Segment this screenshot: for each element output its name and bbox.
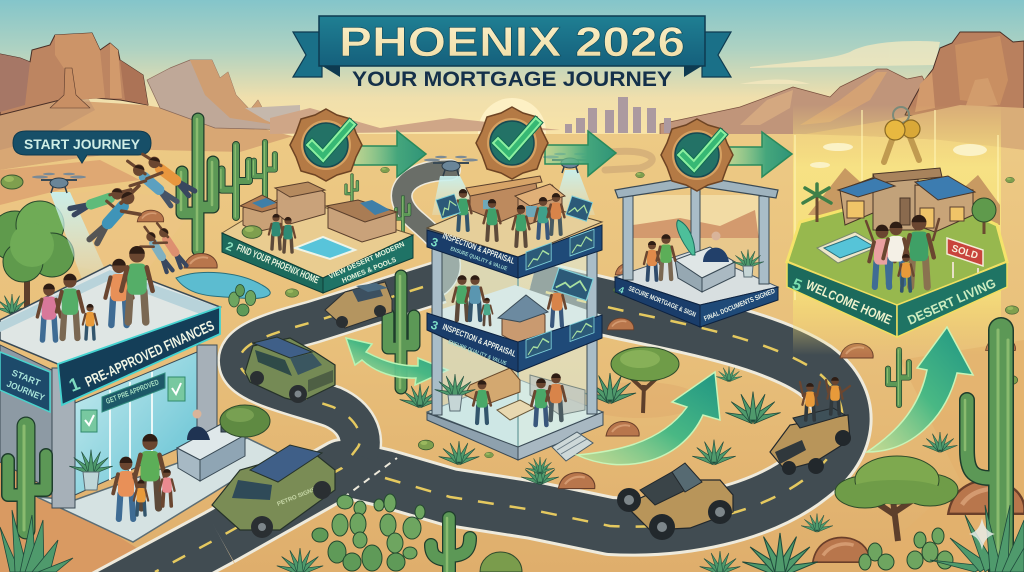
panel 3: inspection and appraisal tower: INSPECTION & APPRAISAL (441, 230, 516, 266)
drones (424, 156, 478, 176)
band (787, 262, 897, 337)
agave bottom left (0, 510, 73, 572)
clients seated (644, 241, 660, 280)
left slopes (0, 100, 300, 170)
corner pillars (52, 368, 75, 508)
panel 2: find your phoenix home: 2 (224, 239, 236, 254)
get pre approved sign (102, 373, 165, 412)
clouds (740, 41, 940, 84)
suv: upper green (245, 337, 335, 403)
badge check two (476, 107, 548, 179)
callout: start journey (13, 131, 151, 163)
left band (222, 233, 323, 293)
upper band (427, 230, 518, 278)
roof deck (0, 265, 220, 365)
start journey sign (0, 352, 50, 412)
panel 3: inspection and appraisal tower (424, 153, 603, 461)
panel 1: pre-approved finances building: GET PRE APPROVED (104, 377, 160, 406)
ground floor furniture (465, 368, 520, 405)
panel 1: pre-approved finances building: JOURNEY (5, 379, 46, 403)
drone beams (432, 176, 480, 215)
pale second mesa (147, 60, 298, 130)
prickly pear cluster right (859, 528, 953, 570)
sign band (58, 307, 220, 405)
panel 2: find your phoenix home: HOMES & POOLS (341, 257, 398, 285)
sold sign (953, 262, 978, 278)
glass checks (81, 377, 185, 432)
pale centre ridge (270, 108, 560, 134)
panel 4: secure mortgage and sign: FINAL DOCUMENTS SIGNED (703, 288, 776, 323)
panel 2: find your phoenix home: VIEW DESERT MODERN (328, 241, 406, 281)
title banner: PHOENIX 2026 (339, 18, 685, 65)
left tree (0, 201, 74, 315)
mid saguaro beside road (388, 276, 414, 388)
middle floor house and people (502, 305, 545, 345)
arrow: badge one to two (354, 131, 426, 177)
small tree by tower (611, 347, 679, 413)
panel 1: pre-approved finances building: START (10, 368, 42, 388)
family walking (113, 457, 139, 519)
advisor (712, 232, 720, 240)
potted plant (68, 450, 114, 475)
shrub beside building (220, 405, 270, 437)
background cacti and scrub (1, 142, 1024, 572)
plant (731, 250, 765, 268)
panel 4: secure mortgage and sign (615, 176, 778, 327)
window scene (633, 195, 759, 280)
arrow: badge two to three (545, 131, 616, 176)
mountains (808, 168, 1000, 225)
glow column (793, 105, 1001, 355)
jeep: road front (617, 463, 733, 540)
desert ground (0, 134, 1024, 572)
panel 5: welcome home: DESERT LIVING (905, 275, 998, 328)
glass walls (432, 248, 518, 447)
arrow: curved growth arrow center (577, 372, 720, 465)
panel: oasis pond (176, 254, 270, 316)
panel 4: secure mortgage and sign: 4 (617, 284, 625, 296)
band (615, 277, 700, 327)
right ridge (660, 69, 940, 135)
panel 3: inspection and appraisal tower: INSPECTION & APPRAISAL (441, 322, 518, 359)
top floor house (470, 178, 540, 222)
arrow: badge three to home (727, 132, 792, 177)
panel 3: inspection and appraisal tower: ENSURE QUALITY & VALUE (447, 339, 508, 367)
couple (269, 214, 283, 249)
lower band (427, 313, 518, 372)
phoenix skyline (565, 97, 671, 133)
shrub bottom (480, 552, 522, 572)
panel 4: secure mortgage and sign: SECURE MORTGAGE & SIGN (627, 285, 697, 319)
drone over start (32, 173, 112, 285)
agave bottom right (930, 505, 1024, 572)
sky background (0, 0, 1024, 140)
big right saguaro (965, 330, 1008, 571)
badge check one (290, 109, 362, 181)
title banner (293, 16, 731, 77)
icon: golden keys (884, 107, 920, 162)
reception desk (177, 423, 245, 460)
family on roof (37, 283, 61, 340)
right band (323, 235, 413, 293)
distant mountains (0, 32, 1024, 170)
bottom-left saguaro (8, 426, 46, 530)
left wing wall (0, 345, 52, 490)
bottom centre saguaro (431, 518, 470, 571)
icon: sparkle watermark (969, 518, 995, 550)
pool (817, 232, 880, 263)
stairs (552, 432, 593, 461)
desk (675, 247, 735, 278)
panel 5: welcome home: SOLD (950, 243, 979, 262)
right tree (982, 215, 986, 234)
house (840, 178, 880, 225)
jeep: couple waving (770, 377, 851, 475)
clouds (810, 143, 987, 168)
floor (615, 250, 778, 305)
family (869, 225, 895, 287)
pillars (623, 196, 633, 280)
centre saguaro (181, 119, 213, 250)
panel 3: inspection and appraisal tower: ENSURE QUALITY & VALUE (449, 246, 508, 272)
panel 1: pre-approved finances building (0, 246, 278, 542)
pillars (432, 247, 442, 415)
panel 1: pre-approved finances building: 1 (66, 373, 83, 396)
panel 3: inspection and appraisal tower: 3 (429, 318, 440, 333)
suv: lower green with solar roof (212, 445, 335, 538)
lawn (787, 208, 1007, 307)
sidewalk (37, 438, 278, 542)
panel 5: welcome home: 5 (790, 276, 804, 295)
far winding roads (402, 151, 652, 285)
arrow: curved growth arrow right (867, 327, 973, 452)
big acacia tree (835, 456, 958, 541)
pool (295, 237, 355, 259)
floor two deck (430, 285, 602, 345)
road network (92, 282, 843, 572)
callout: start journey: START JOURNEY (24, 137, 140, 152)
flying family figures (70, 153, 201, 274)
left mesa (0, 33, 148, 115)
roof frame (615, 176, 778, 198)
panel 2: find your phoenix home: FIND YOUR PHOENIX HOME (235, 243, 321, 287)
arrow: double headed left of tower (346, 338, 448, 385)
base plinth (427, 413, 518, 460)
palm (816, 195, 818, 222)
badge check three (661, 119, 733, 191)
panel 1: pre-approved finances building: PRE-APPROVED FINANCES (83, 318, 217, 391)
top deck (427, 195, 602, 257)
right slopes (800, 105, 1024, 150)
subtitle: YOUR MORTGAGE JOURNEY (352, 68, 672, 91)
quill feather (677, 220, 695, 255)
glass front (75, 352, 197, 495)
panel 3: inspection and appraisal tower: 3 (429, 235, 440, 250)
right mesa (905, 32, 1024, 120)
panel 5: welcome home: WELCOME HOME (804, 277, 894, 328)
suv: distant tan (325, 282, 392, 328)
banker (192, 410, 202, 418)
houses (240, 182, 397, 242)
suv: lower green with solar roof: PETRO SIGNS (277, 487, 317, 508)
sun behind skyline (478, 98, 546, 166)
prickly pear cluster centre (312, 494, 425, 571)
panel 5: welcome home (787, 105, 1007, 355)
panel 2: find your phoenix home (222, 182, 413, 293)
ground colour patches (0, 160, 1024, 572)
ground floor deck (427, 378, 603, 447)
